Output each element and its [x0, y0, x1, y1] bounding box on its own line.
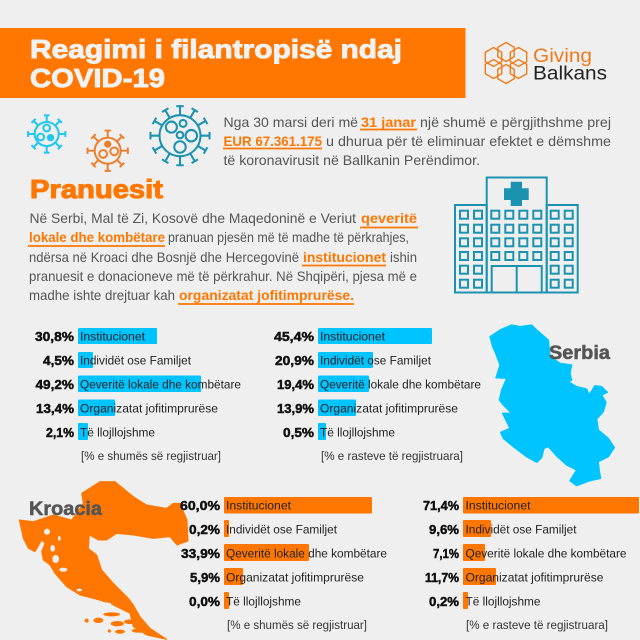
header banner: [0, 28, 466, 98]
intro text: [223, 115, 611, 168]
bar chart: Croatia, amount: Të llojllojshme: [226, 594, 301, 608]
bar chart: Serbia, cases: [274, 328, 481, 463]
bar chart: Croatia, amount: 60,0%: [180, 498, 220, 513]
bar chart: Croatia, amount: 0,0%: [189, 594, 220, 609]
bar chart: Croatia, cases: 9,6%: [429, 522, 459, 537]
intro text: të koronavirusit në Ballkanin Perëndimor.: [224, 153, 480, 168]
bar chart: Croatia, amount: 33,9%: [181, 546, 220, 561]
bar chart: Serbia, amount: 30,8%: [35, 329, 74, 344]
bar chart: Croatia, cases: 11,7%: [425, 570, 459, 585]
bar chart: Croatia, cases: Qeveritë lokale dhe kombëtare: [466, 546, 627, 560]
bar chart: Serbia, cases: 45,4%: [274, 329, 314, 344]
title: COVID-19: [30, 63, 165, 93]
intro text: u dhurua për të eliminuar efektet e dëmshme: [326, 134, 611, 149]
bar chart: Croatia, amount: [% e shumës së regjistruar]: [227, 618, 367, 632]
text block: recipients: lokale dhe kombëtare: [29, 230, 165, 245]
map: Serbia: [490, 325, 614, 486]
intro text: EUR 67.361.175: [224, 134, 322, 149]
bar chart: Serbia, amount: Qeveritë lokale dhe kombëtare: [80, 378, 241, 392]
bar chart: Croatia, cases: Organizatat jofitimprurëse: [466, 570, 604, 584]
text block: recipients: ndërsa në Kroaci dhe Bosnjë dhe Hercegovinë: [29, 250, 299, 265]
text block: recipients: pranuesit e donacioneve më të përkrahur. Në Shqipëri, pjesa më e: [29, 269, 417, 284]
bar chart: Serbia, amount: Të llojllojshme: [80, 426, 155, 440]
bar chart: Serbia, amount: Individët ose Familjet: [80, 354, 192, 368]
intro text: një shumë e përgjithshme prej: [420, 115, 611, 130]
bar chart: Serbia, cases: Qeveritë lokale dhe kombëtare: [320, 378, 481, 392]
logo: Giving Balkans: Balkans: [533, 62, 607, 84]
bar chart: Serbia, amount: Organizatat jofitimprurëse: [80, 402, 218, 416]
bar chart: Croatia, amount: Organizatat jofitimprurëse: [226, 570, 364, 584]
title: [30, 34, 402, 93]
bar chart: Croatia, amount: Institucionet: [226, 498, 292, 512]
heading: Pranuesit: Pranuesit: [30, 174, 163, 204]
bar chart: Croatia, cases: Institucionet: [466, 498, 531, 512]
bar chart: Serbia, amount: [35, 328, 241, 463]
bar chart: Croatia, cases: [% e rasteve të regjistruara]: [466, 618, 608, 632]
bar chart: Serbia, cases: 13,9%: [277, 401, 314, 416]
bar chart: Croatia, amount: Qeveritë lokale dhe kombëtare: [226, 546, 387, 560]
text block: recipients: organizatat jofitimprurëse.: [179, 288, 354, 303]
bar chart: Serbia, cases: Të llojllojshme: [320, 426, 395, 440]
logo: Giving Balkans: Giving: [533, 45, 592, 67]
bar chart: Serbia, amount: [% e shumës së regjistruar]: [81, 449, 221, 463]
icon: hospital building: [455, 178, 578, 292]
bar chart: Serbia, amount: 49,2%: [36, 377, 74, 392]
text block: recipients: [28, 211, 418, 304]
bar chart: Serbia, cases: [% e rasteve të regjistruara]: [321, 449, 463, 463]
label: Kroacia: Kroacia: [29, 499, 102, 520]
icon: orange virus: [88, 131, 128, 171]
bar chart: Serbia, amount: 13,4%: [36, 401, 74, 416]
bar chart: Serbia, cases: Individët ose Familjet: [320, 354, 432, 368]
bar chart: Serbia, cases: 20,9%: [275, 353, 314, 368]
bar chart: Serbia, amount: 2,1%: [46, 425, 74, 440]
bar chart: Croatia, cases: 7,1%: [433, 546, 459, 561]
intro text: 31 janar: [361, 115, 417, 130]
bar chart: Serbia, cases: Institucionet: [320, 330, 386, 344]
text block: recipients: ishin: [390, 250, 417, 265]
icon: cyan virus: [28, 115, 65, 153]
title: Reagimi i filantropisë ndaj: [30, 34, 402, 64]
label: Serbia: Serbia: [549, 343, 610, 364]
text block: recipients: qeveritë: [361, 211, 417, 226]
bar chart: Croatia, cases: Të llojllojshme: [466, 594, 541, 608]
bar chart: Serbia, cases: 0,5%: [283, 425, 314, 440]
bar chart: Croatia, cases: Individët ose Familjet: [466, 522, 577, 536]
text block: recipients: institucionet: [303, 250, 386, 265]
icon: teal virus: [150, 106, 210, 165]
bar chart: Serbia, amount: Institucionet: [80, 330, 146, 344]
text block: recipients: pranuan pjesën më të madhe të përkrahjes,: [168, 230, 409, 245]
bar chart: Croatia, cases: 71,4%: [423, 498, 459, 513]
bar chart: Croatia, cases: [423, 497, 639, 632]
logo: Giving Balkans: [485, 42, 607, 84]
bar chart: Croatia, amount: 5,9%: [190, 570, 220, 585]
bar chart: Croatia, amount: Individët ose Familjet: [226, 522, 338, 536]
bar chart: Serbia, cases: 19,4%: [277, 377, 314, 392]
bar chart: Croatia, cases: 0,2%: [429, 594, 459, 609]
intro text: Nga 30 marsi deri më: [224, 115, 358, 130]
map: Croatia: [19, 482, 188, 639]
bar chart: Serbia, amount: 4,5%: [43, 353, 74, 368]
text block: recipients: madhe ishte drejtuar kah: [29, 288, 175, 303]
bar chart: Croatia, amount: 0,2%: [189, 522, 220, 537]
bar chart: Croatia, amount: [180, 497, 387, 632]
text block: recipients: Në Serbi, Mal të Zi, Kosovë dhe Maqedoninë e Veriut: [30, 211, 356, 226]
bar chart: Serbia, cases: Organizatat jofitimprurëse: [320, 402, 458, 416]
